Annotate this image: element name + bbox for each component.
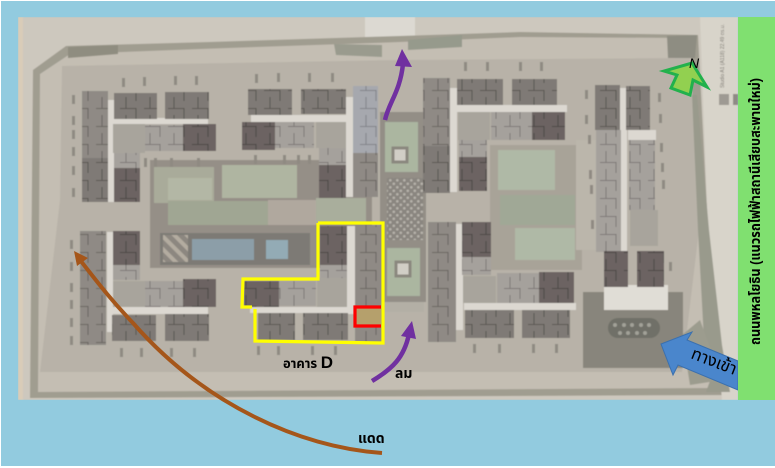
arrow: wind inflow xyxy=(372,321,416,381)
building cluster: far right xyxy=(595,85,664,288)
site ground xyxy=(38,37,716,392)
panel: road xyxy=(738,17,775,400)
label: building D: อาคาร D xyxy=(283,353,333,372)
arrow: entrance xyxy=(661,332,740,390)
building cluster: bottom right xyxy=(428,222,576,342)
cover strip below the plan xyxy=(1,400,775,466)
building cluster: top left xyxy=(82,91,216,202)
parking bay marks xyxy=(70,62,672,357)
highlight: building D outline xyxy=(242,223,383,343)
label: sun: แดด xyxy=(358,430,385,446)
car park xyxy=(583,285,683,368)
arrow: sun path xyxy=(74,251,382,453)
label: wind: ลม xyxy=(395,365,412,381)
arrow: wind outflow xyxy=(385,49,412,120)
building D xyxy=(244,225,382,342)
building cluster: top middle xyxy=(242,86,378,198)
paper sheet xyxy=(18,17,738,400)
highlight: unit xyxy=(355,307,381,327)
building cluster: bottom left xyxy=(80,231,216,345)
site boundary xyxy=(30,32,736,398)
road band xyxy=(40,58,699,372)
top-edge grey patches xyxy=(68,45,118,58)
label: entrance: ทางเข้า xyxy=(689,343,740,379)
building cluster: top right xyxy=(423,78,567,193)
site plan photograph xyxy=(18,17,738,400)
legend text: Studio A1 (A118) 22.49 ตร.ม. xyxy=(720,24,726,88)
legend strip xyxy=(700,17,738,400)
right courtyards xyxy=(490,140,596,270)
label: road name: ถนนพหลโยธิน (แนวรถไฟฟ้าสถานีเสียบสะพานใหม่) xyxy=(747,78,763,345)
label: north: N xyxy=(689,55,700,71)
icon: north arrow xyxy=(664,55,707,95)
central garden strip xyxy=(380,112,426,312)
left courtyard xyxy=(150,160,372,268)
